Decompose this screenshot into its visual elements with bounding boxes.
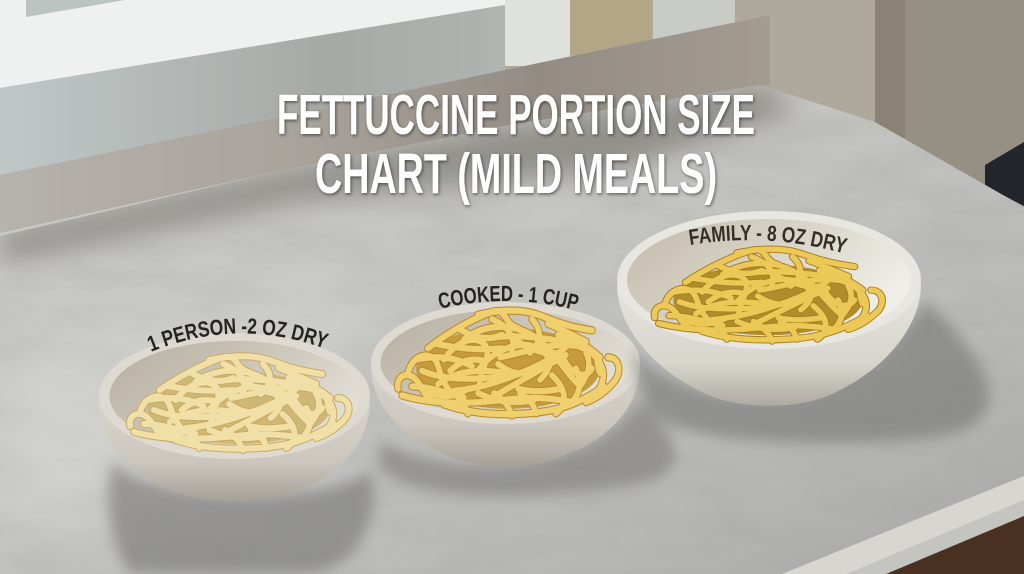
bowl interior [110, 341, 360, 451]
window sill stone [0, 15, 770, 233]
bowl body [371, 368, 640, 466]
marble mottling [450, 201, 637, 252]
bowl: family [617, 211, 989, 443]
wall: vertical post [875, 0, 905, 160]
wall: right panel [905, 0, 1024, 215]
shadow [630, 300, 989, 443]
window frame highlight [0, 0, 505, 88]
wall: behind the counter [505, 0, 1024, 260]
wooden cabinet [886, 516, 1024, 574]
label: family: FAMILY - 8 OZ DRY [688, 225, 848, 252]
outside view [570, 0, 650, 56]
label: 1 person: 1 PERSON -2 OZ DRY [148, 318, 330, 352]
bowl: 1 person [99, 333, 374, 574]
shadow along back edge of counter [0, 85, 800, 262]
shadow [109, 462, 374, 574]
bowl body [617, 286, 921, 406]
bowl: cooked [371, 302, 675, 496]
dark object: right side [985, 142, 1024, 206]
bowl rim [617, 211, 921, 349]
bowl interior [380, 310, 630, 416]
window pane right [653, 0, 735, 40]
bowl rim [99, 333, 370, 459]
bowl body [99, 402, 370, 501]
window frame face [0, 5, 505, 175]
label: cooked: COOKED - 1 CUP [438, 286, 579, 308]
window mullion [505, 0, 575, 66]
title: CHART (MILD MEALS) [315, 142, 717, 206]
bowl interior [627, 219, 911, 341]
counter front edge [782, 476, 1024, 574]
noodles [398, 310, 619, 416]
noodles [130, 356, 349, 450]
light reflection on counter [0, 285, 360, 540]
window glass [26, 0, 125, 17]
title [277, 83, 755, 206]
shadow [380, 400, 675, 496]
noodles [654, 249, 882, 341]
bowl rim [371, 302, 640, 424]
